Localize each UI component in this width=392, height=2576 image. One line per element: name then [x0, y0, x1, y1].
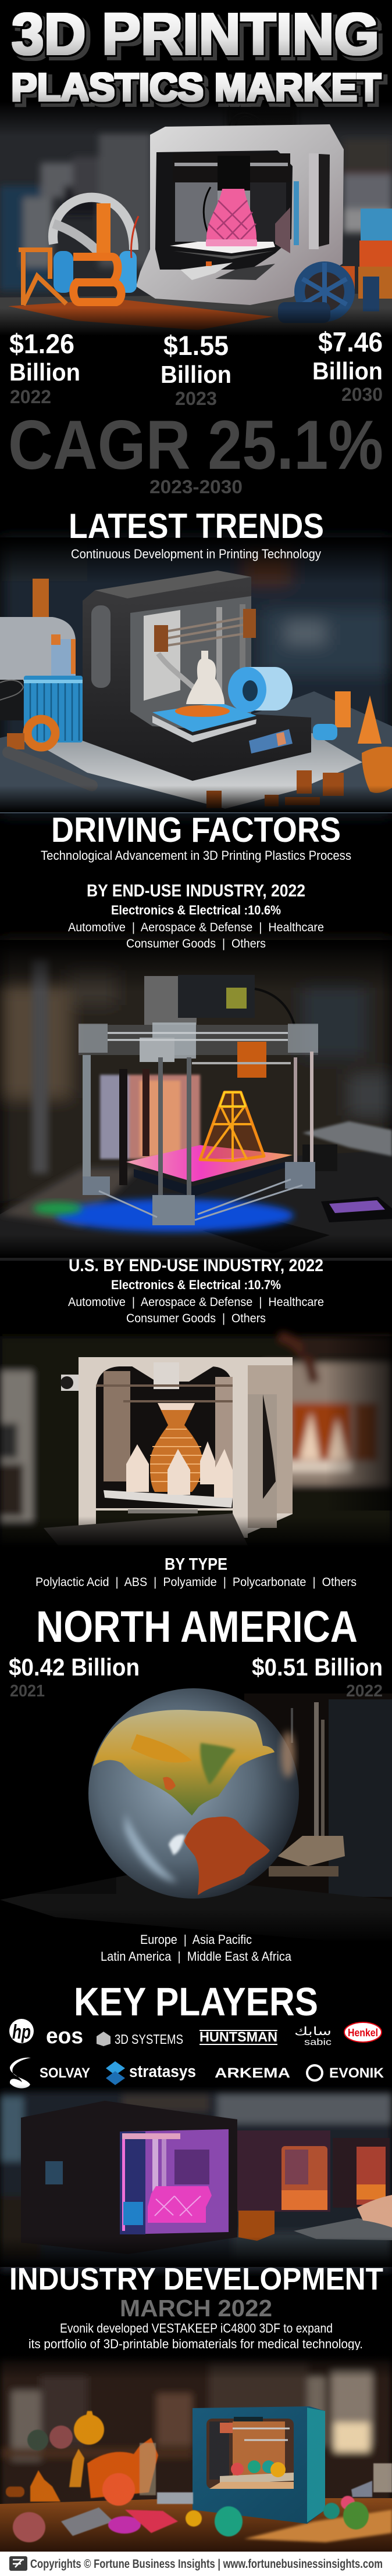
printed white object — [186, 651, 224, 704]
region list — [101, 1932, 292, 1964]
logo: hp: hp — [12, 2021, 31, 2043]
segment block: by end-use industry — [68, 881, 324, 950]
heading: key players: KEY PLAYERS — [74, 1979, 318, 2024]
stat: north america 2021: $0.42 Billion — [9, 1653, 140, 1681]
heading: driving factors: DRIVING FACTORS — [51, 810, 341, 849]
platform — [0, 1874, 392, 1940]
colorful printed objects — [6, 2411, 392, 2542]
display panel — [249, 729, 293, 754]
segment block: U.S. by end-use industry: Automotive | Aerospace & Defense | Healthcare — [68, 1296, 324, 1309]
panel: latest trends illustration — [0, 537, 392, 813]
illustration: pink printed vase — [206, 189, 257, 246]
title line 2: PLASTICS MARKET — [11, 66, 381, 109]
panel: company logos — [9, 2019, 384, 2088]
segment block: by type: Polylactic Acid | ABS | Polyamide | Polycarbonate | Others — [35, 1576, 357, 1589]
segment block: U.S. by end-use industry: Consumer Goods | Others — [126, 1312, 266, 1325]
panel: hero — [0, 102, 392, 339]
table — [0, 1150, 392, 1261]
logo: Solvay — [10, 2058, 90, 2088]
logo: Arkema: ARKEMA — [215, 2065, 290, 2081]
logo: Sabic — [294, 2024, 332, 2047]
workbench — [0, 691, 392, 813]
glowing build plate — [126, 1145, 293, 1182]
panel: white printer illustration — [0, 1336, 392, 1549]
development text: its portfolio of 3D-printable biomaterials for medical technology. — [28, 2337, 363, 2351]
panel: footer — [0, 2552, 392, 2576]
segment block: by end-use industry: Automotive | Aerospace & Defense | Healthcare — [68, 921, 324, 934]
control box on top — [144, 975, 294, 1025]
logo: Solvay: SOLVAY — [40, 2065, 90, 2081]
segment block: U.S. by end-use industry — [68, 1256, 324, 1325]
segment block: by type: BY TYPE — [165, 1555, 227, 1574]
orange printed vase — [150, 1403, 202, 1492]
illustration: white 3D printer — [136, 124, 344, 305]
transparent frame — [79, 1022, 318, 1225]
globe sphere — [88, 1688, 299, 1899]
stat: north america 2021: 2021 — [10, 1682, 45, 1700]
main black printer — [21, 2101, 237, 2254]
logo: 3D Systems — [97, 2032, 183, 2047]
phone — [321, 1197, 392, 1222]
stat: 2023: $1.55 — [163, 330, 229, 361]
heading: latest trends: LATEST TRENDS — [69, 507, 324, 546]
stat: 2030: Billion — [312, 357, 383, 385]
logo: Evonik — [307, 2065, 384, 2081]
illustration: black 3D printer — [83, 571, 311, 781]
icon: Fortune Business Insights logo — [9, 2556, 27, 2571]
subheading: latest trends: Continuous Development in Printing Technology — [71, 547, 321, 561]
logo: 3D Systems: 3D SYSTEMS — [115, 2032, 183, 2047]
region list: Europe | Asia Pacific — [140, 1932, 252, 1947]
development text — [28, 2321, 363, 2351]
segment block: by end-use industry: Consumer Goods | Others — [126, 937, 266, 950]
date: march 2022: MARCH 2022 — [120, 2295, 272, 2322]
title line 1: 3D PRINTING — [12, 2, 379, 67]
logo: Evonik: EVONIK — [329, 2065, 384, 2081]
panel: teal printer illustration — [0, 2350, 392, 2552]
table and orange mat — [0, 293, 392, 337]
logo: Henkel: Henkel — [348, 2027, 378, 2039]
side printers — [237, 2130, 392, 2241]
wooden table — [0, 2498, 392, 2552]
stat: 2030 — [312, 327, 383, 405]
room background — [0, 2359, 392, 2510]
printer behind globe — [244, 1694, 392, 1914]
stat: north america 2022: $0.51 Billion — [252, 1653, 383, 1681]
subheading: driving factors: Technological Advancement in 3D Printing Plastics Process — [41, 848, 351, 863]
orange pyramid print — [200, 1092, 264, 1161]
stat: 2023: Billion — [161, 361, 231, 388]
stat: north america 2022 — [252, 1653, 383, 1700]
stat: 2022: 2022 — [10, 386, 51, 407]
background blur — [0, 540, 392, 813]
panel: transparent printer illustration — [0, 940, 392, 1261]
main white frame — [60, 1357, 293, 1538]
logo: Sabic: sabic — [304, 2037, 332, 2047]
development text: Evonik developed VESTAKEEP iC4800 3DF to expand — [60, 2321, 333, 2335]
workshop background — [0, 941, 392, 1208]
blue filament roll — [228, 667, 293, 712]
stat: 2030: 2030 — [341, 384, 383, 405]
blurred background — [0, 2091, 392, 2272]
panel: globe illustration — [0, 1688, 392, 1943]
clouds and ocean highlights — [125, 1813, 177, 1882]
logo: eos: eos — [46, 2024, 83, 2048]
south america landmass — [184, 1817, 270, 1895]
logo: Sabic: سابك — [294, 2024, 332, 2038]
illustration: filament spools right — [278, 209, 392, 323]
teal printer — [193, 2406, 325, 2524]
segment block: by end-use industry: BY END-USE INDUSTRY, 2022 — [87, 881, 305, 900]
logo: Huntsman: HUNTSMAN — [199, 2029, 277, 2045]
pink printed object — [148, 2186, 212, 2223]
light glow — [55, 1199, 294, 1232]
segment block: U.S. by end-use industry: Electronics & Electrical :10.7% — [111, 1278, 281, 1292]
panel: purple printers illustration — [0, 2091, 392, 2272]
segment block: by end-use industry: Electronics & Electrical :10.6% — [111, 903, 281, 917]
bed — [104, 1490, 233, 1508]
left props — [0, 579, 92, 785]
CAGR period: 2023-2030 — [149, 476, 243, 497]
stat: north america 2021 — [9, 1653, 140, 1700]
stat: 2022 — [9, 328, 80, 407]
blurred background printers — [0, 1336, 392, 1545]
stat: north america 2022: 2022 — [346, 1682, 383, 1700]
stat: 2023 — [161, 330, 231, 409]
north america landmass — [93, 1710, 275, 1816]
logo: Stratasys — [106, 2061, 196, 2085]
stat: 2022: $1.26 — [9, 328, 74, 359]
small lattice towers — [126, 1441, 233, 1498]
right printed parts — [206, 691, 392, 808]
stat: 2023: 2023 — [175, 388, 217, 409]
logo: Henkel — [344, 2022, 382, 2042]
segment block: U.S. by end-use industry: U.S. BY END-USE INDUSTRY, 2022 — [69, 1256, 323, 1275]
illustration: printed plastic objects left — [19, 198, 138, 305]
bed plate — [170, 242, 275, 253]
stat: 2022: Billion — [9, 358, 80, 386]
segment block: by type — [35, 1555, 357, 1589]
logo: Stratasys: stratasys — [129, 2062, 196, 2081]
printer back panel — [100, 1075, 200, 1159]
region list: Latin America | Middle East & Africa — [101, 1949, 292, 1964]
icon: printer cables — [229, 113, 265, 129]
stat: 2030: $7.46 — [318, 327, 383, 357]
hero background workshop — [0, 102, 392, 334]
